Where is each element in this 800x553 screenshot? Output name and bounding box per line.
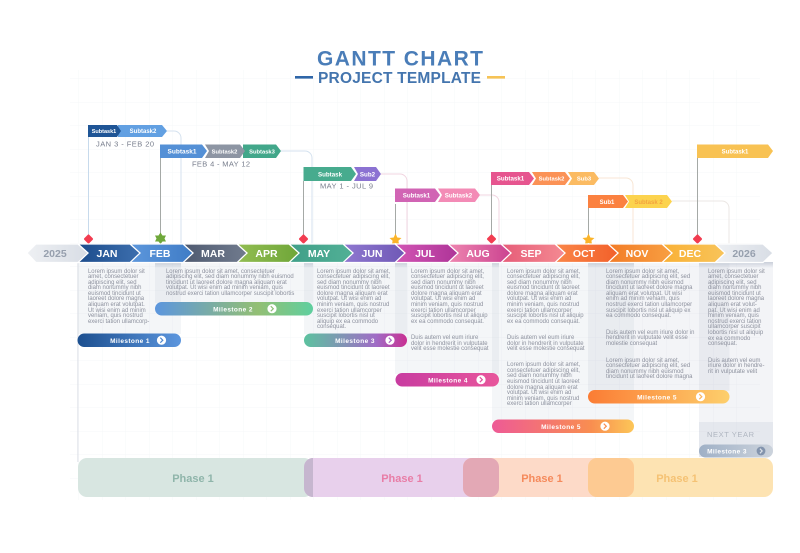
text block: October: diam nonummy nibh euismod: [606, 280, 684, 286]
task bar: Jan 3 - Feb 20: JAN 3 - FEB 20: [96, 140, 154, 148]
text block: May: minim veniam, quis nostrud: [317, 302, 389, 308]
text block: December: iriure dolor in hendre-: [708, 363, 764, 369]
task bar: October: [588, 195, 672, 208]
text block: January: laoreet dolore magna: [88, 296, 144, 302]
text block: December: minim veniam, quis: [708, 313, 759, 319]
text block: September: velit esse molestie consequat: [507, 346, 585, 352]
text block: December: lobortis nisl ut aliquip: [708, 330, 763, 336]
task bar: July: [395, 188, 480, 202]
milestone bar, next year: Milestone 3: [707, 448, 747, 456]
task bar: December: [697, 144, 773, 158]
task bar: August: Sub3: [577, 177, 592, 183]
timeline month NOV: NOV: [626, 248, 648, 260]
text block: January: amet, consectetuer: [88, 274, 138, 280]
text block: February: nostrud exerci tation ullamcorper suscipit lobortis: [166, 291, 294, 297]
text block: October: tincidunt ut laoreet dolore magna: [606, 374, 692, 380]
timeline month APR: APR: [255, 248, 278, 260]
text block: May: sed diam nonummy nibh: [317, 280, 382, 286]
timeline month MAR: [183, 244, 247, 262]
connector lines: [88, 131, 729, 244]
text block: December: euismod tincidunt ut: [708, 291, 761, 297]
timeline month FEB: FEB: [150, 248, 171, 260]
marker: Aug diamond: [487, 234, 496, 244]
text block: July: Lorem ipsum dolor sit amet,: [411, 268, 484, 274]
task bar: Feb 4 - May 12: FEB 4 - MAY 12: [192, 160, 250, 168]
task bar: Jan 3 - Feb 20: Subtask2: [130, 129, 157, 135]
timeline month AUG: AUG: [466, 248, 490, 260]
text block: September: sed diam nonummy nibh: [507, 373, 572, 379]
text block: July: suscipit lobortis nisl ut aliquip: [411, 313, 488, 319]
text block: January: euismod tincidunt ut: [88, 291, 141, 297]
text block: September: exerci tation ullamcorper: [507, 401, 572, 407]
text block: October: consectetuer adipiscing elit, sed: [606, 363, 690, 369]
timeline month SEP: [501, 244, 565, 262]
text block: May: Lorem ipsum dolor sit amet,: [317, 268, 390, 274]
text block: December: ex ea commodo: [708, 336, 750, 342]
timeline month JUL: [395, 244, 458, 262]
text block: October: aliquam erat volutpat. Ut wisi: [606, 291, 682, 297]
text block: May: dolore magna aliquam erat: [317, 291, 388, 297]
text block: January: diam nonummy nibh: [88, 285, 141, 291]
text block: July: consectetuer adipiscing elit,: [411, 274, 484, 280]
title: [295, 48, 505, 87]
text block: October: Lorem ipsum dolor sit amet,: [606, 358, 679, 364]
title: PROJECT TEMPLATE: [318, 70, 481, 87]
text block: July: dolor in hendrerit in vulputate: [411, 341, 488, 347]
text block: January: [88, 268, 150, 325]
task bar: October: Subtask 2: [634, 200, 663, 206]
task bar: May 1 - Jul 9: Sub2: [360, 171, 376, 178]
timeline month OCT: OCT: [573, 248, 596, 260]
text block: May: [317, 268, 390, 330]
task bar: July: Subtask1: [403, 193, 431, 200]
phase band: peach: [463, 458, 634, 497]
marker: Jan diamond: [84, 234, 93, 244]
text block: October: consectetuer adipiscing elit, sed: [606, 274, 690, 280]
timeline month JUN: JUN: [361, 248, 383, 260]
timeline month MAR: MAR: [201, 248, 225, 260]
marker: Dec diamond: [693, 234, 702, 244]
task bar: Feb 4 - May 12: Subtask1: [168, 148, 197, 156]
task bar: Jan 3 - Feb 20: Subtask1: [92, 129, 116, 135]
text block: May: aliquip ex ea commodo: [317, 319, 378, 325]
milestone 5 bar, lower: [492, 420, 634, 433]
text block: December: rit in vulputate velit: [708, 369, 757, 375]
text block: September: [507, 268, 585, 407]
month timeline: [27, 244, 773, 262]
text block: December: amet, consectetuer: [708, 274, 758, 280]
text block: September: suscipit lobortis nisl ut aliquip: [507, 313, 584, 319]
text block: September: Lorem ipsum dolor sit amet,: [507, 362, 580, 368]
text block: May: volutpat. Ut wisi enim ad: [317, 296, 381, 302]
text block: December: [708, 268, 765, 375]
marker: Jun star: [390, 234, 402, 245]
text block: December: ullamcorper suscipit: [708, 324, 760, 330]
text block: July: exerci tation ullamcorper: [411, 308, 476, 314]
text block: May: consectetuer adipiscing elit,: [317, 274, 390, 280]
timeline year 2025: [27, 244, 88, 262]
milestone markers: [84, 232, 702, 245]
timeline month MAY: MAY: [308, 248, 330, 260]
text block: February: Lorem ipsum dolor sit amet, consectetuer: [166, 268, 275, 274]
timeline month APR: [237, 244, 299, 262]
task bar: July: Subtask2: [445, 193, 473, 200]
text block: September: dolore magna aliquam erat: [507, 291, 578, 297]
text block: September: ex ea commodo consequat.: [507, 319, 580, 325]
task bar: Feb 4 - May 12: Subtask3: [249, 150, 276, 156]
text block: October: molestie consequat: [606, 341, 657, 347]
phase band: yellow: Phase 1: [656, 473, 698, 485]
text block: January: aliquam erat volutpat.: [88, 302, 145, 308]
text block: September: consectetuer adipiscing elit,: [507, 274, 580, 280]
text block: September: exerci tation ullamcorper: [507, 308, 572, 314]
text block: December: pat. Ut wisi enim ad: [708, 308, 760, 314]
timeline month DEC: [662, 244, 725, 262]
text block: September: minim veniam, quis nostrud: [507, 396, 579, 402]
milestone 5 bar, upper: [588, 390, 730, 404]
marker: May diamond: [299, 234, 308, 244]
milestone 4 bar: [396, 373, 499, 386]
timeline year 2026: [715, 244, 773, 262]
task bar: August: Subtask1: [497, 176, 525, 183]
text block: September: Lorem ipsum dolor sit amet,: [507, 268, 580, 274]
text block: September: volutpat. Ut wisi enim ad: [507, 296, 571, 302]
text block: December: nostrud exerci tation: [708, 319, 761, 325]
task bar: December: Subtask1: [722, 149, 749, 155]
text block: October: ea commodo consequat.: [606, 313, 671, 319]
milestone 5 bar, lower: Milestone 5: [541, 424, 581, 431]
text block: October: Lorem ipsum dolor sit amet,: [606, 268, 679, 274]
title: GANTT CHART: [317, 48, 483, 70]
text block: December: Lorem ipsum dolor sit: [708, 268, 765, 274]
text block: December: laoreet dolore magna: [708, 296, 764, 302]
text block: September: Duis autem vel eum iriure: [507, 335, 574, 341]
timeline month MAY: [289, 244, 353, 262]
text block: September: minim veniam, quis nostrud: [507, 302, 579, 308]
text block: December: Duis autem vel eum: [708, 358, 760, 364]
task bar: August: [491, 172, 599, 185]
phase band: pink: Phase 1: [381, 473, 423, 485]
text block: September: dolor in hendrerit in vulputate: [507, 341, 584, 347]
text block: February: adipiscing elit, sed diam nonummy nibh euismod: [166, 274, 294, 280]
phase band: teal: [78, 458, 313, 497]
timeline month OCT: [555, 244, 618, 262]
text block: September: sed diam nonummy nibh: [507, 280, 572, 286]
timeline month JAN: JAN: [96, 248, 118, 260]
text block: October: diam nonummy nibh euismod: [606, 369, 684, 375]
timeline month JUL: JUL: [415, 248, 436, 260]
text block: September: volutpat. Ut wisi enim ad: [507, 390, 571, 396]
milestone 2 bar: [155, 302, 313, 316]
text block: July: minim veniam, quis nostrud: [411, 302, 483, 308]
phase bands: [78, 458, 773, 497]
milestone 1 bar: [78, 334, 181, 347]
panel: description column backgrounds: [78, 262, 773, 462]
text block: January: veniam, quis nostrud: [88, 313, 143, 319]
marker: Oct star: [582, 234, 594, 245]
next year label: NEXT YEAR: [707, 430, 755, 439]
text block: October: suscipit lobortis nisl ut aliquip ex: [606, 308, 690, 314]
text block: January: exerci tation ullamcorp-: [88, 319, 149, 325]
text block: July: volutpat. Ut wisi enim ad: [411, 296, 475, 302]
text block: September: consectetuer adipiscing elit,: [507, 368, 580, 374]
text block: July: sed diam nonummy nibh: [411, 280, 476, 286]
text block: January: adipiscing elit, sed: [88, 280, 137, 286]
phase band: teal: Phase 1: [172, 473, 214, 485]
text block: July: velit esse molestie consequat: [411, 346, 489, 352]
task bar: Feb 4 - May 12: [160, 144, 281, 168]
text block: February: [166, 268, 294, 297]
milestone 4 bar: Milestone 4: [428, 377, 468, 384]
text block: October: tincidunt ut laoreet dolore magna: [606, 285, 692, 291]
task bar: May 1 - Jul 9: Subtask: [318, 171, 343, 178]
phase band: pink: [304, 458, 499, 497]
text block: July: euismod tincidunt ut laoreet: [411, 285, 484, 291]
text block: December: consequat.: [708, 341, 737, 347]
text block: October: nostrud exerci tation ullamcorper: [606, 302, 692, 308]
timeline year 2026: 2026: [732, 248, 756, 260]
text block: September: euismod tincidunt ut laoreet: [507, 379, 580, 385]
timeline month DEC: DEC: [679, 248, 702, 260]
milestone 1 bar: Milestone 1: [110, 338, 150, 345]
marker: Feb star: [155, 232, 166, 244]
milestone 3 bar: [304, 334, 407, 347]
text block: December: diam nonummy nibh: [708, 285, 761, 291]
phase band: yellow: [588, 458, 773, 497]
text block: September: euismod tincidunt ut laoreet: [507, 285, 580, 291]
text block: October: enim ad minim veniam, quis: [606, 296, 680, 302]
text block: July: Duis autem vel eum iriure: [411, 335, 478, 341]
timeline month JUN: [343, 244, 405, 262]
timeline month NOV: [608, 244, 672, 262]
text block: October: Duis autem vel eum iriure dolor in: [606, 330, 694, 336]
milestone 2 bar: Milestone 2: [213, 306, 253, 313]
text block: May: exerci tation ullamcorper: [317, 308, 382, 314]
timeline month SEP: SEP: [520, 248, 542, 260]
text block: February: volutpat. Ut wisi enim ad minim veniam, quis: [166, 285, 283, 291]
text block: December: aliquam erat volut-: [708, 302, 757, 308]
milestone bar, next year: [699, 444, 773, 458]
text block: September: dolore magna aliquam erat: [507, 385, 578, 391]
text block: July: [411, 268, 489, 352]
text block: January: Lorem ipsum dolor sit: [88, 268, 145, 274]
milestone 5 bar, upper: Milestone 5: [637, 394, 677, 401]
timeline month JAN: [78, 244, 140, 262]
task bar: October: Sub1: [600, 200, 615, 206]
text block: May: suscipit lobortis nisl ut: [317, 313, 375, 319]
task bar: May 1 - Jul 9: [304, 167, 381, 190]
text block: October: hendrerit in vulputate velit esse: [606, 335, 688, 341]
text block: January: Ut wisi enim ad minim: [88, 308, 146, 314]
task bar: August: Subtask2: [539, 177, 564, 183]
timeline year 2025: 2025: [43, 248, 67, 260]
text block: May: consequat.: [317, 324, 346, 330]
text block: December: adipiscing elit, sed: [708, 280, 757, 286]
timeline month AUG: [448, 244, 511, 262]
text block: February: tincidunt ut laoreet dolore magna aliquam erat: [166, 280, 287, 286]
text block: July: ex ea commodo consequat.: [411, 319, 484, 325]
phase band: peach: Phase 1: [521, 473, 563, 485]
text block: July: dolore magna aliquam erat: [411, 291, 482, 297]
milestone 3 bar: Milestone 3: [335, 338, 375, 345]
task bar: May 1 - Jul 9: MAY 1 - JUL 9: [320, 182, 373, 190]
timeline month FEB: [130, 244, 193, 262]
text block: May: euismod tincidunt ut laoreet: [317, 285, 390, 291]
text block: October: [606, 268, 694, 380]
task bar: Jan 3 - Feb 20: [88, 125, 167, 148]
task bar: Feb 4 - May 12: Subtask2: [212, 150, 237, 156]
